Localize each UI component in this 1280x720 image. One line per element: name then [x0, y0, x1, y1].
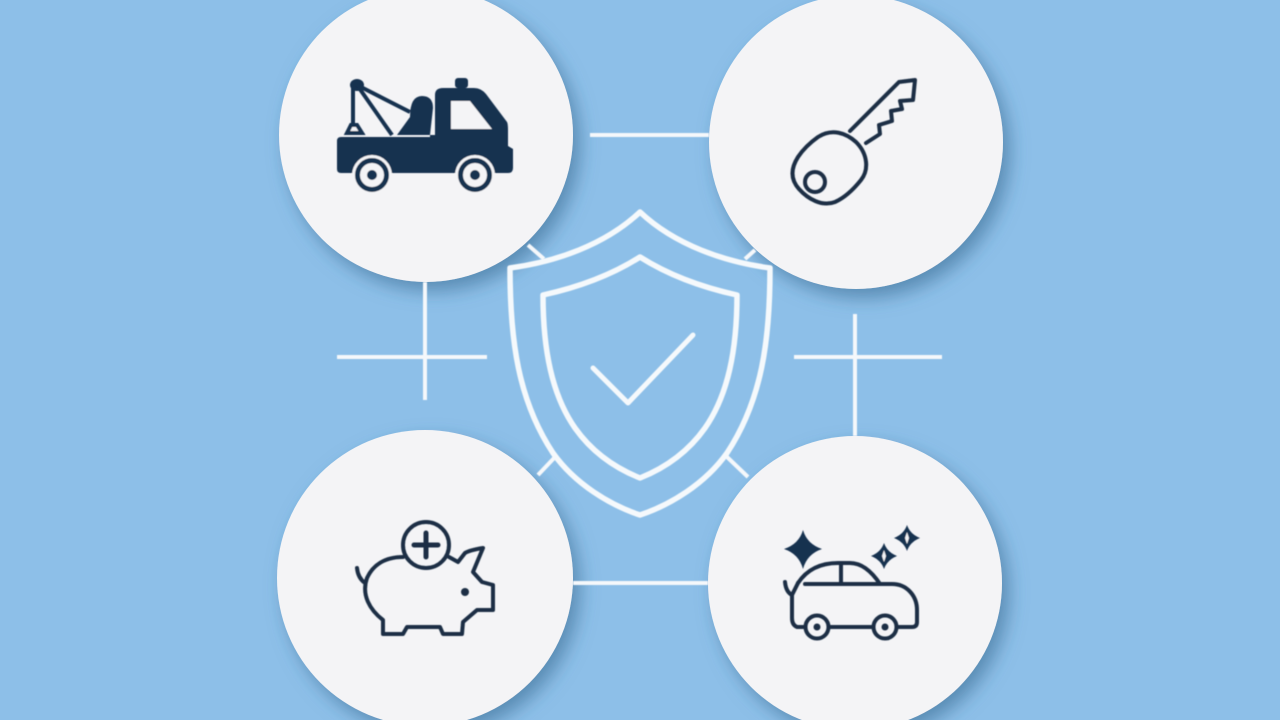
icon: piggy bank with plus coin	[357, 522, 493, 634]
icon: shield with check mark	[510, 212, 770, 515]
icon: key	[792, 80, 915, 204]
icon: tow truck	[337, 78, 513, 195]
panel: key circle	[709, 0, 1003, 289]
icon: shiny car	[784, 525, 920, 638]
connector lines	[337, 135, 942, 583]
panel: piggy bank circle	[277, 430, 573, 720]
panel: tow truck circle	[279, 0, 573, 282]
panel: clean car circle	[708, 436, 1002, 720]
